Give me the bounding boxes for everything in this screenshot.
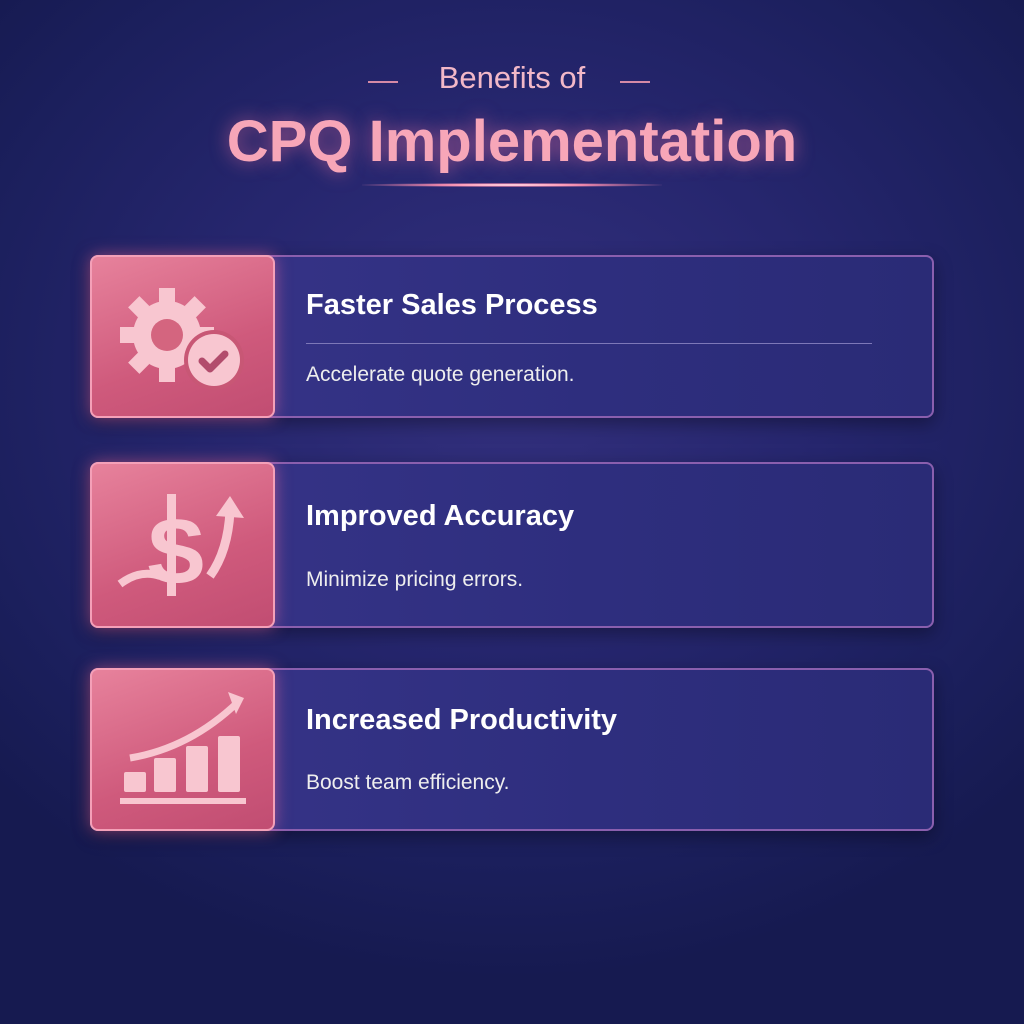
title: CPQ Implementation bbox=[227, 109, 797, 174]
description: Minimize pricing errors. bbox=[306, 568, 523, 591]
icon: dollar with arrow: S bbox=[146, 502, 206, 602]
description: Boost team efficiency. bbox=[306, 771, 510, 794]
panel: faster sales process bbox=[90, 255, 934, 418]
heading: Improved Accuracy bbox=[306, 500, 574, 532]
subtitle: Benefits of bbox=[439, 60, 585, 95]
panel: increased productivity bbox=[90, 668, 934, 831]
panel: improved accuracy bbox=[90, 462, 934, 628]
icon: gear with check bbox=[90, 255, 275, 418]
description: Accelerate quote generation. bbox=[306, 363, 575, 386]
heading: Faster Sales Process bbox=[306, 289, 598, 321]
icon: bar chart with arrow bbox=[90, 668, 275, 831]
icon: dollar with arrow bbox=[90, 462, 275, 628]
heading: Increased Productivity bbox=[306, 704, 617, 736]
